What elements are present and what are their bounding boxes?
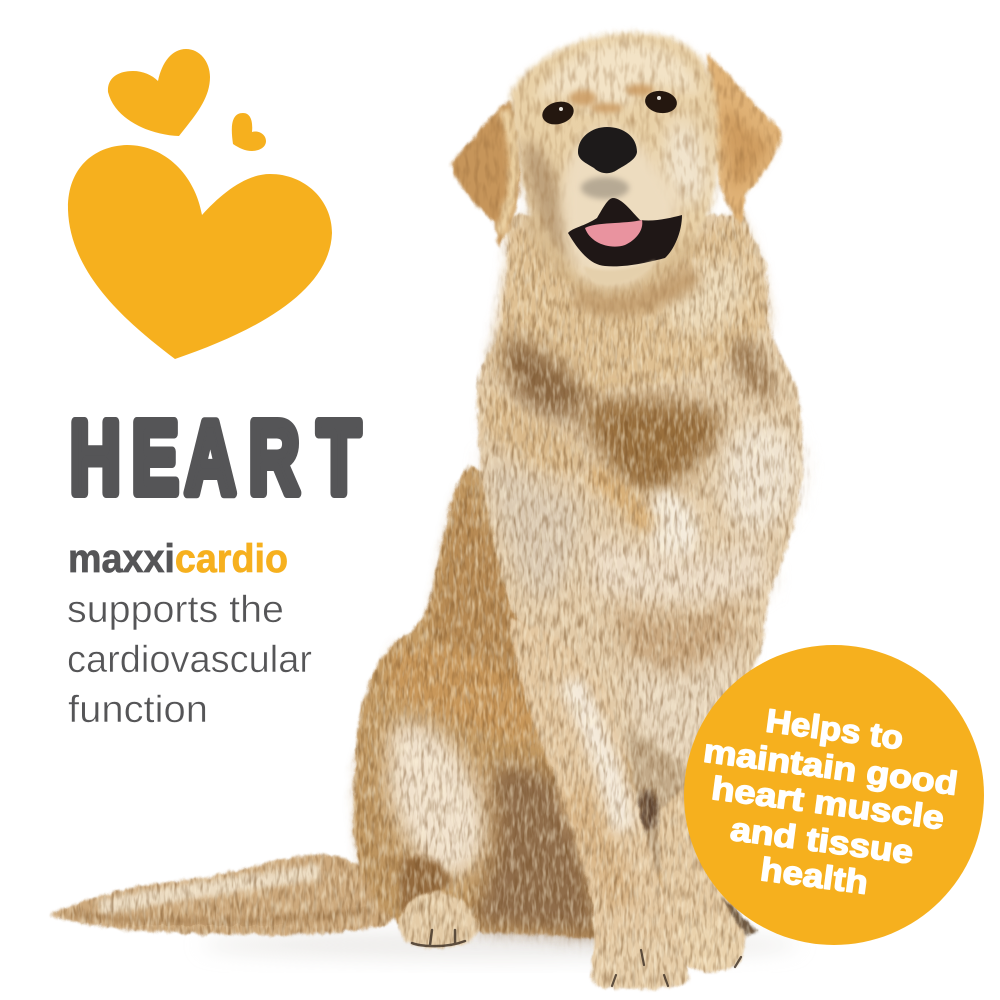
outer thigh xyxy=(358,750,425,915)
callout: circle xyxy=(684,645,984,945)
left cheek shading xyxy=(522,140,575,270)
dark gap spot xyxy=(638,790,658,830)
thigh highlight xyxy=(388,721,487,878)
callout text xyxy=(687,694,965,911)
tail xyxy=(50,854,395,935)
callout text: health xyxy=(758,850,870,901)
near front leg xyxy=(510,620,688,989)
callout text: heart muscle xyxy=(710,769,946,836)
callout text: and tissue xyxy=(728,810,916,871)
description text: cardiovascular xyxy=(67,639,312,681)
neck fur xyxy=(490,215,770,395)
brand name: maxxicardio: maxxicardio xyxy=(68,537,288,581)
rear paw toes xyxy=(412,930,465,946)
neck light right xyxy=(662,259,748,335)
right eye xyxy=(644,89,678,115)
torso and chest xyxy=(477,215,803,790)
icon: small heart xyxy=(108,49,210,136)
hindquarters xyxy=(354,465,700,938)
dark neck patch left xyxy=(504,335,590,419)
flank shading xyxy=(430,490,550,706)
jaw neck shadow xyxy=(575,262,700,315)
neck patch right xyxy=(730,335,775,400)
lower lip chin xyxy=(583,260,655,285)
front paw toes xyxy=(612,950,741,986)
rear paw xyxy=(399,892,478,947)
nose xyxy=(578,127,637,173)
beard shading xyxy=(581,177,629,199)
dark chest band xyxy=(580,398,721,492)
far front leg xyxy=(659,775,758,971)
description text: function xyxy=(68,689,208,731)
jaw blend xyxy=(528,215,695,288)
callout text: Helps to xyxy=(764,702,905,756)
dog fur body xyxy=(50,215,803,989)
light chest lower xyxy=(590,530,770,604)
right cheek highlight xyxy=(663,115,709,206)
head xyxy=(511,33,719,287)
leg shadow near paw xyxy=(400,856,450,915)
tan chest lower xyxy=(610,600,740,690)
ground shadow xyxy=(200,931,800,959)
eye brows xyxy=(569,84,654,113)
icon: large heart xyxy=(68,145,332,359)
left ear edge xyxy=(500,110,514,235)
right ear shading xyxy=(725,105,770,190)
right ear xyxy=(707,53,783,224)
mouth xyxy=(568,198,682,266)
callout text: maintain good xyxy=(701,732,960,802)
tongue xyxy=(585,220,642,247)
left ear xyxy=(451,100,520,248)
left eye xyxy=(540,98,576,128)
white chest centre xyxy=(648,490,700,562)
face details xyxy=(540,84,682,285)
under belly dark xyxy=(470,765,600,935)
forehead highlight xyxy=(535,42,700,110)
dog head xyxy=(451,33,783,315)
illustration: golden retriever xyxy=(50,33,803,989)
grey-beige chest left xyxy=(485,455,583,600)
cream lower chest xyxy=(625,640,745,780)
gap between legs xyxy=(625,725,695,880)
description text xyxy=(67,589,312,731)
rump golden patch xyxy=(385,644,535,745)
golden fur left chest xyxy=(485,385,581,473)
icon: tiny heart xyxy=(232,113,266,151)
description text: supports the xyxy=(67,589,284,631)
paw toes xyxy=(412,930,741,986)
muzzle xyxy=(562,125,680,285)
heading: HEART: HEART xyxy=(70,399,360,515)
golden wave xyxy=(590,470,650,530)
cream chest right xyxy=(721,423,800,534)
